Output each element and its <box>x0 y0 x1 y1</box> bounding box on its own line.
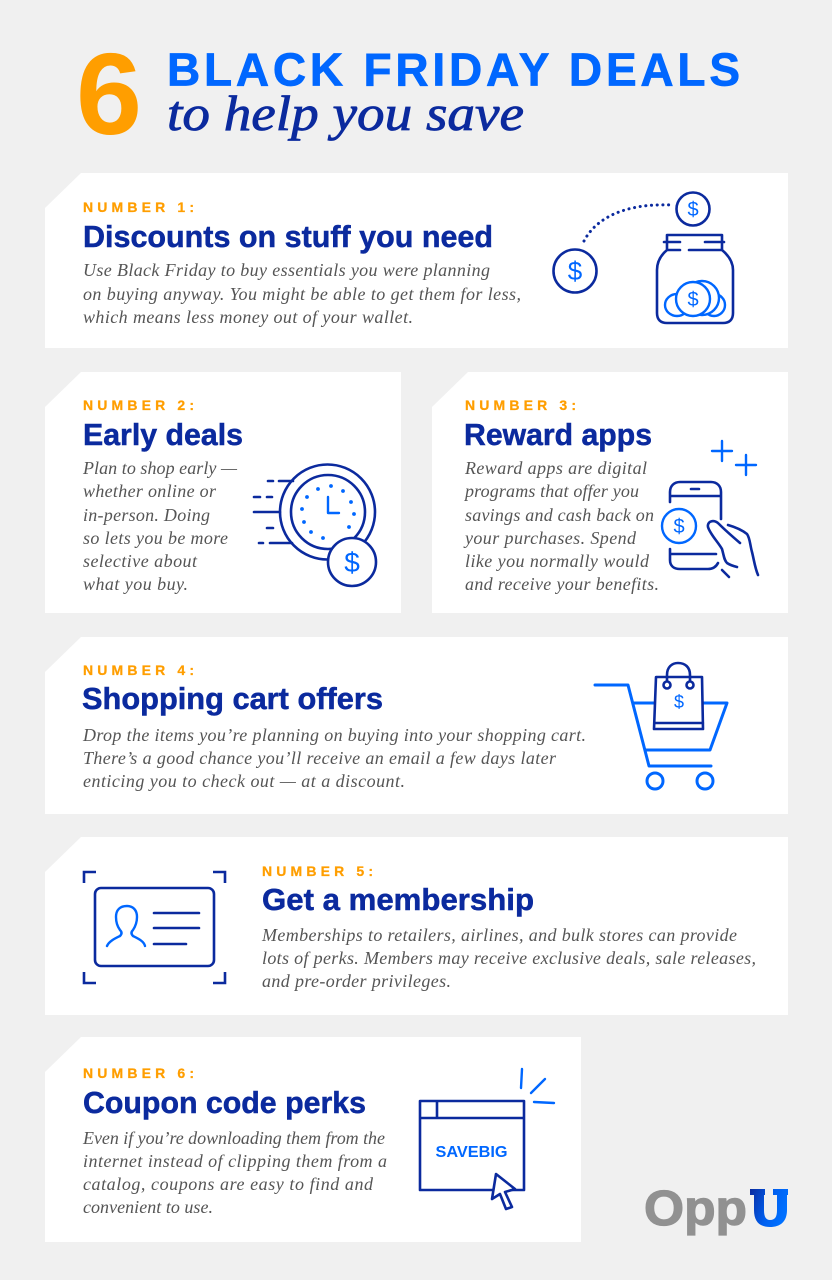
body: reward apps: your purchases. Spend <box>463 528 637 548</box>
panel: number 4 <box>45 637 788 814</box>
body: discounts: which means less money out of your wallet. <box>83 307 413 327</box>
body: reward apps <box>463 458 659 594</box>
icon: coin jar <box>554 192 733 323</box>
body: discounts <box>83 260 521 327</box>
body: shopping cart: There’s a good chance you’ll receive an email a few days later <box>83 748 557 768</box>
heading: early deals: Early deals <box>83 417 243 452</box>
heading: coupon code: Coupon code perks <box>83 1085 366 1120</box>
body: shopping cart <box>82 725 586 791</box>
body: membership: and pre-order privileges. <box>262 971 451 991</box>
body: membership: Memberships to retailers, airlines, and bulk stores can provide <box>261 925 737 945</box>
label: number 4: NUMBER 4: <box>83 662 194 678</box>
body: shopping cart: Drop the items you’re planning on buying into your shopping cart. <box>82 725 586 745</box>
icon: coupon window with cursor: SAVEBIG <box>436 1144 508 1161</box>
body: shopping cart: enticing you to check out — at a discount. <box>83 771 405 791</box>
icon: shopping cart with bag <box>595 663 727 789</box>
body: early deals <box>82 458 238 594</box>
subheading: to help you save <box>167 85 524 141</box>
body: coupon code <box>82 1128 387 1217</box>
body: reward apps: savings and cash back on <box>465 505 654 525</box>
body: coupon code: catalog, coupons are easy to find and <box>83 1174 374 1194</box>
heading: membership: Get a membership <box>262 882 534 917</box>
heading: reward apps: Reward apps <box>464 417 652 452</box>
panel: number 3 <box>432 372 788 613</box>
body: membership: lots of perks. Members may receive exclusive deals, sale releases, <box>262 948 756 968</box>
icon: coin jar: $ <box>568 256 583 286</box>
panel: number 2 <box>45 372 401 613</box>
heading: black friday deals: BLACK FRIDAY DEALS <box>167 44 740 96</box>
label: number 3: NUMBER 3: <box>465 397 576 413</box>
icon: phone and hand <box>662 441 758 577</box>
icon: clock with coin <box>254 464 376 586</box>
logo: OppU: Opp <box>644 1182 747 1236</box>
logo: OppU <box>644 1182 788 1236</box>
big orange six: 6 <box>76 29 142 159</box>
title <box>76 29 740 159</box>
icon: coin jar: $ <box>687 199 699 221</box>
icon: membership id card <box>84 872 225 983</box>
heading: shopping cart: Shopping cart offers <box>82 681 383 716</box>
body: coupon code: convenient to use. <box>83 1197 213 1217</box>
body: coupon code: internet instead of clipping them from a <box>83 1151 387 1171</box>
icon: phone and hand: $ <box>673 516 685 538</box>
label: number 6: NUMBER 6: <box>83 1065 194 1081</box>
body: early deals: so lets you be more <box>83 528 228 548</box>
body: early deals: in-person. Doing <box>83 505 210 525</box>
body: coupon code: Even if you’re downloading them from the <box>82 1128 385 1148</box>
body: early deals: whether online or <box>83 481 217 501</box>
body: early deals: selective about <box>83 551 198 571</box>
body: discounts: Use Black Friday to buy essentials you were planning <box>83 260 490 280</box>
panel: number 6 <box>45 1037 581 1242</box>
body: reward apps: and receive your benefits. <box>465 574 659 594</box>
body: reward apps: like you normally would <box>465 551 650 571</box>
panel: number 1 <box>45 173 788 348</box>
body: early deals: Plan to shop early — <box>82 458 238 478</box>
icon: coupon window with cursor <box>420 1069 554 1209</box>
icon: shopping cart with bag: $ <box>674 692 684 712</box>
label: number 5: NUMBER 5: <box>262 863 373 879</box>
body: discounts: on buying anyway. You might be able to get them for less, <box>83 284 521 304</box>
body: early deals: what you buy. <box>83 574 188 594</box>
body: reward apps: programs that offer you <box>463 481 639 501</box>
panel: number 5 <box>45 837 788 1015</box>
label: number 1: NUMBER 1: <box>83 199 194 215</box>
heading: discounts: Discounts on stuff you need <box>83 219 493 254</box>
label: number 2: NUMBER 2: <box>83 397 194 413</box>
icon: coin jar: $ <box>687 289 699 311</box>
icon: clock with coin: $ <box>344 547 360 578</box>
body: membership <box>261 925 756 991</box>
body: reward apps: Reward apps are digital <box>464 458 647 478</box>
